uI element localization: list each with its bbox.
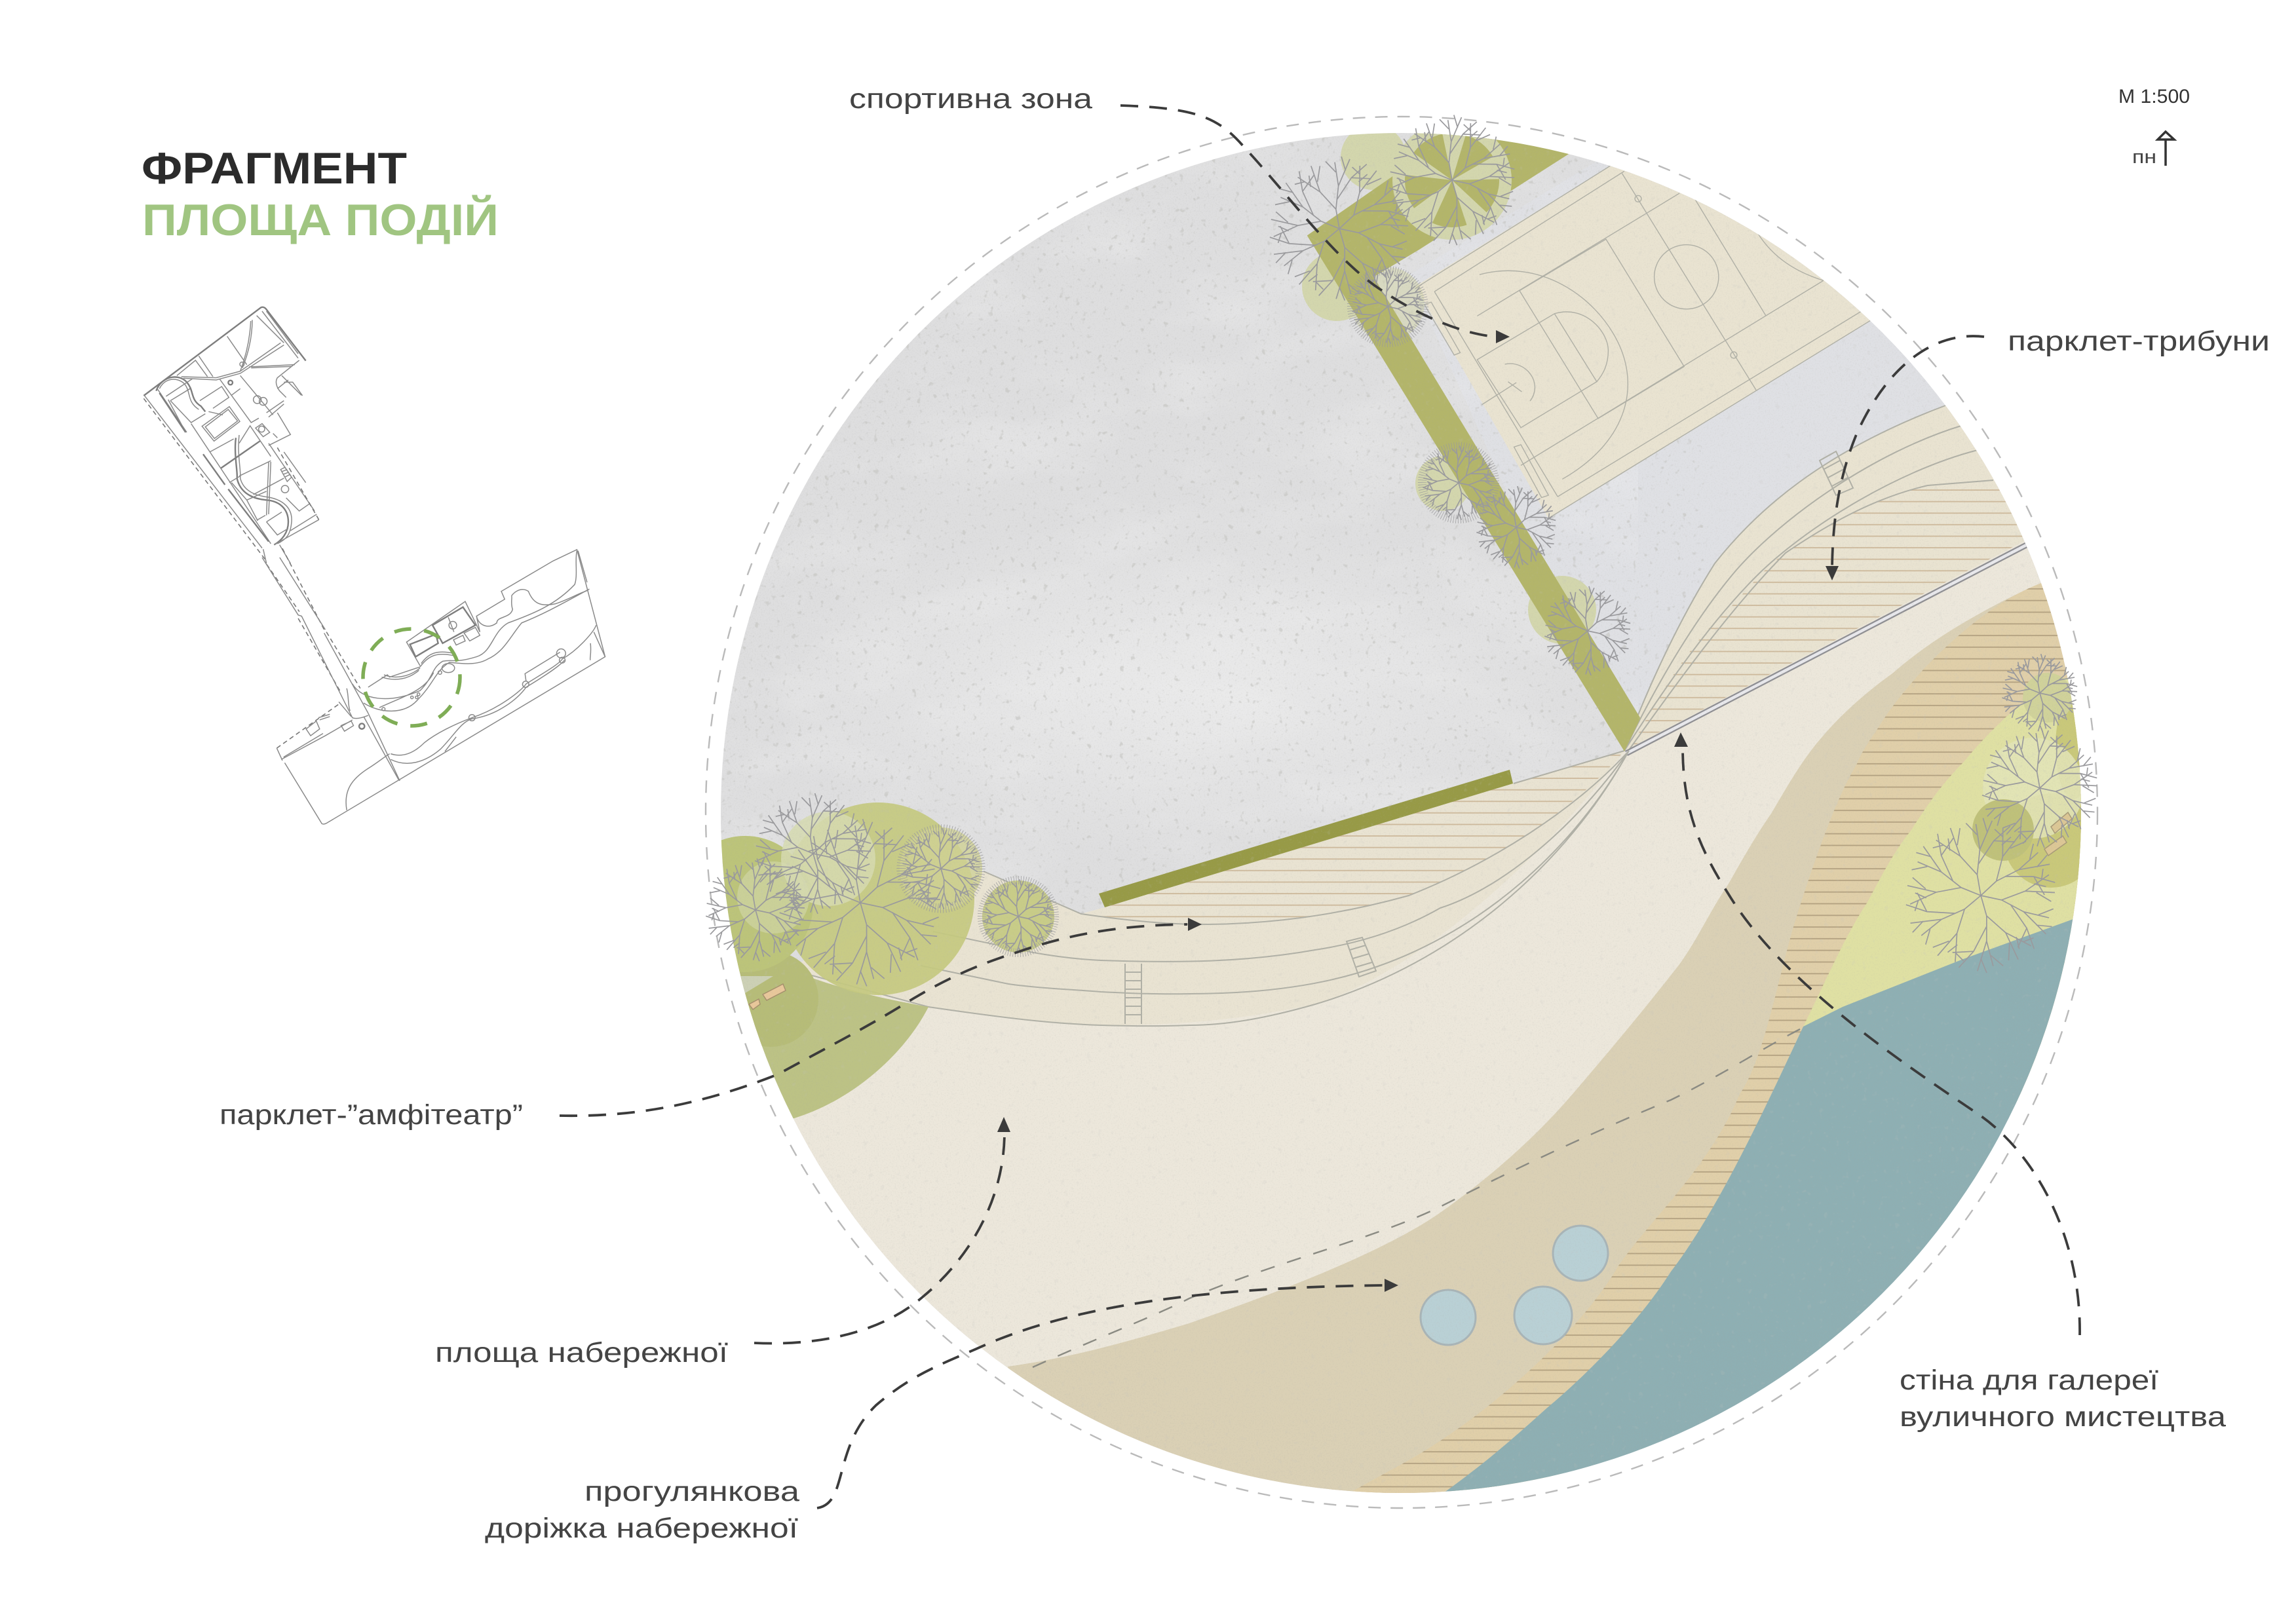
label: amphitheatre parklet: парклет-”амфітеатр” — [220, 1099, 523, 1131]
highlight marker on site plan — [363, 629, 460, 726]
sports court surface — [1415, 166, 1900, 518]
amphitheatre curves — [788, 751, 1629, 1026]
sports court lines — [1415, 166, 1870, 518]
concrete specks — [721, 133, 1704, 985]
hatching: amphitheatre parklet — [1075, 747, 1632, 930]
site plan: promenade and south block — [262, 548, 605, 824]
west lawn shade — [723, 951, 818, 1047]
olive wall — [1099, 770, 1513, 907]
title line: fragment: ФРАГМЕНТ — [142, 143, 407, 193]
surface grain — [721, 133, 2081, 1493]
panel: circular fragment plan — [721, 133, 2081, 1493]
dashed outer ring — [706, 117, 2097, 1508]
lawn on river bank — [1803, 678, 2162, 1027]
label: embankment walkway — [485, 1476, 799, 1544]
hatching: tribune parklet — [1632, 459, 2097, 747]
north arrow — [2132, 132, 2174, 168]
trees west — [697, 785, 1060, 1000]
canopy of tree by basketball court — [1392, 121, 1512, 240]
sand promenade — [1008, 557, 2162, 1572]
title — [142, 143, 499, 245]
concrete light band — [1064, 633, 1318, 742]
concrete surface — [721, 133, 2081, 1493]
callout arrow: amphitheatre parklet — [560, 918, 1202, 1116]
trees east — [1893, 649, 2106, 986]
label: gallery wall: вуличного мистецтва — [1900, 1401, 2226, 1433]
plaza surface — [794, 541, 2041, 1368]
title line: event square: ПЛОЩА ПОДІЙ — [142, 195, 499, 245]
tribune curves — [1624, 406, 1993, 751]
tree canopies east — [1972, 673, 2098, 888]
label: gallery wall: стіна для галереї — [1900, 1365, 2158, 1396]
label: embankment square: площа набережної — [435, 1337, 728, 1369]
north east tribune surface — [1624, 393, 2110, 751]
label: gallery wall — [1900, 1365, 2226, 1433]
key site plan — [144, 307, 605, 824]
thin dashed path line — [1033, 1029, 1800, 1367]
tree canopies along strip — [1302, 124, 1596, 644]
west green lawn — [655, 969, 928, 1127]
bluish concrete east of strip — [1409, 144, 2097, 753]
green strip and band — [1307, 132, 1641, 751]
amphitheatre surface — [788, 751, 1624, 1025]
callout arrow: gallery wall — [1674, 732, 2080, 1335]
callout arrow: embankment square — [754, 1117, 1010, 1344]
label: embankment walkway: прогулянкова — [584, 1476, 799, 1507]
site plan: north block — [144, 307, 319, 563]
river water — [1428, 907, 2162, 1507]
concrete blotches — [721, 133, 1638, 919]
label: sports zone: спортивна зона — [849, 83, 1092, 115]
north arrow: пн — [2132, 147, 2156, 168]
scale label: М 1:500 — [2118, 86, 2190, 107]
callout arrow: tribune parklet — [1826, 336, 1984, 580]
round pools — [1421, 1226, 1608, 1345]
callout arrow: sports zone — [1120, 105, 1510, 343]
trees north — [1258, 105, 1637, 683]
label: embankment walkway: доріжка набережної — [485, 1513, 798, 1544]
bench west — [749, 984, 786, 1010]
label: tribune parklet: парклет-трибуни — [2008, 326, 2270, 357]
surface specks — [721, 133, 2081, 1493]
timber deck — [1330, 576, 2162, 1507]
deck hatching — [1330, 576, 2162, 1507]
rail wall — [1626, 542, 2031, 753]
callout arrow: embankment walkway — [817, 1279, 1398, 1508]
benches east — [2044, 812, 2072, 856]
tree canopies west — [677, 803, 1054, 1002]
